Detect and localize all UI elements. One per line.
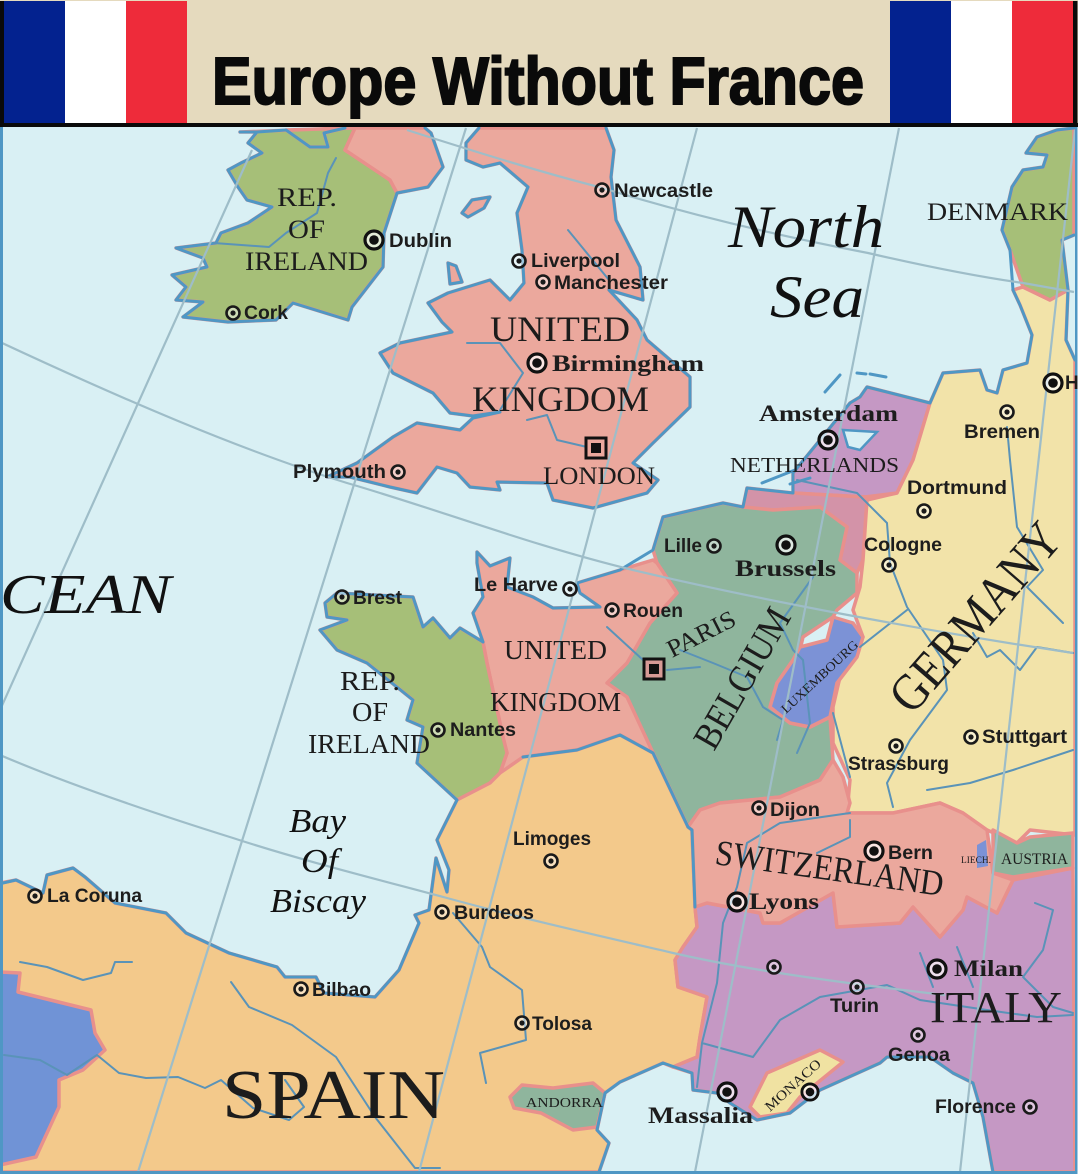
city: Cologne: Cologne [864, 535, 942, 556]
land: Normandy labelled United Kingdom [473, 552, 677, 773]
city: Limoges [513, 829, 591, 868]
label: United Kingdom: KINGDOM [472, 379, 649, 419]
marker: Paris [644, 659, 664, 679]
city: Cork: Cork [244, 303, 288, 324]
label: Republic of Ireland: IRELAND [245, 247, 368, 276]
flag: left French flag [0, 1, 187, 124]
city: Newcastle: Newcastle [614, 181, 713, 202]
label: Republic of Ireland (Brittany): IRELAND [308, 729, 430, 759]
label: Belgium: BELGIUM [685, 600, 800, 756]
label: Bay of Biscay [270, 803, 367, 920]
label: Republic of Ireland (Brittany): OF [352, 697, 388, 727]
label: Republic of Ireland (Brittany): REP. [340, 666, 400, 696]
label: North Sea [727, 194, 884, 330]
land: Denmark [1002, 128, 1074, 300]
city: Lyons: Lyons [749, 889, 819, 914]
city: Lyons [728, 889, 819, 914]
land: Great Britain [327, 128, 690, 508]
islands: Frisian [762, 373, 886, 484]
city: Strassburg [848, 740, 949, 775]
label: Ocean: CEAN [0, 564, 174, 626]
label: London: LONDON [543, 463, 655, 490]
land: southwest France labelled Spain [0, 735, 707, 1172]
label: United Kingdom: UNITED [490, 309, 630, 349]
city: Bern: Bern [888, 843, 933, 864]
city: Milan [928, 956, 1023, 981]
label: North Sea: Sea [770, 264, 864, 330]
coastline: Ireland [172, 128, 443, 322]
label: United Kingdom (Normandy) [490, 635, 621, 717]
label: Republic of Ireland: OF [288, 215, 325, 244]
land: Switzerland [688, 760, 1013, 937]
city: Nantes: Nantes [450, 720, 516, 741]
land: Liechtenstein [977, 840, 988, 868]
label: Paris: PARIS [662, 606, 741, 663]
city: Dijon: Dijon [770, 800, 820, 821]
city: Brussels: Brussels [735, 556, 836, 581]
land: Portugal-coloured region [0, 972, 105, 1165]
city: Rouen: Rouen [623, 601, 683, 622]
country labels [222, 183, 1073, 1134]
header banner [0, 0, 1078, 127]
marker: London [586, 438, 606, 458]
flag: right French flag [890, 1, 1078, 124]
city: Massalia [648, 1083, 754, 1128]
city: Nice marker [802, 1084, 818, 1100]
land: Northern Ireland [345, 128, 443, 193]
land: Germany [833, 287, 1075, 843]
label: Austria: AUSTRIA [1001, 851, 1068, 868]
city: Stuttgart: Stuttgart [982, 727, 1068, 748]
city: Liverpool: Liverpool [531, 251, 620, 272]
label: Monaco: MONACO [763, 1057, 825, 1115]
label: Bay of Biscay: Biscay [270, 883, 367, 920]
land: Austria [993, 830, 1073, 877]
city: Bremen [964, 406, 1040, 443]
label: Bay of Biscay: Of [301, 843, 343, 880]
city: Brussels [735, 536, 836, 581]
city: Lille: Lille [664, 536, 702, 557]
city: Birmingham: Birmingham [552, 351, 704, 376]
land: Isle of Man [462, 197, 490, 217]
city: Amsterdam: Amsterdam [759, 401, 898, 426]
city: Dortmund [907, 478, 1007, 518]
label: Denmark: DENMARK [927, 199, 1068, 226]
sea: IJsselmeer [843, 430, 877, 450]
city: Turin [830, 980, 879, 1017]
city: Strassburg: Strassburg [848, 754, 949, 775]
label: Spain: SPAIN [222, 1057, 445, 1134]
city: Hamburg fragment [1044, 373, 1079, 394]
land: Monaco [750, 1050, 843, 1117]
label: North Sea: North [727, 194, 884, 260]
label: Andorra: ANDORRA [526, 1096, 604, 1111]
land: Andorra [510, 1083, 605, 1130]
city: Hamburg fragment: H [1065, 373, 1079, 394]
city: Dortmund: Dortmund [907, 478, 1007, 499]
city: Limoges: Limoges [513, 829, 591, 850]
city: Dublin: Dublin [389, 231, 452, 252]
land: Italy [673, 868, 1075, 1172]
city: Brest: Brest [353, 588, 403, 609]
city: Turin: Turin [830, 996, 879, 1017]
city: Plymouth: Plymouth [293, 462, 386, 483]
land: Luxembourg [770, 617, 863, 727]
city: Bilbao: Bilbao [312, 980, 371, 1001]
land: Ireland [172, 128, 397, 322]
city: Burdeos: Burdeos [454, 903, 534, 924]
city: Manchester: Manchester [554, 273, 669, 294]
city: Bremen: Bremen [964, 422, 1040, 443]
label: Republic of Ireland [245, 183, 368, 276]
title: Europe Without France [212, 44, 864, 119]
label: Luxembourg: LUXEMBOURG [778, 637, 861, 716]
banner background [0, 0, 1078, 124]
label: United Kingdom (Normandy): KINGDOM [490, 687, 621, 717]
coastline: Great Britain [327, 128, 690, 508]
label: Switzerland: SWITZERLAND [713, 832, 946, 904]
land: Netherlands [793, 387, 930, 497]
label: Bay of Biscay: Bay [289, 803, 347, 840]
city: Cork [226, 303, 288, 324]
capital markers [586, 438, 664, 679]
cities [28, 181, 1079, 1128]
city: Amsterdam [759, 401, 898, 449]
label: United Kingdom [472, 309, 649, 419]
land: northern France labelled Belgium [607, 503, 857, 827]
label: United Kingdom (Normandy): UNITED [504, 635, 607, 665]
banner rule [0, 123, 1078, 127]
city: Le Harve: Le Harve [474, 575, 558, 596]
label: Italy: ITALY [930, 983, 1062, 1032]
city: La Coruna: La Coruna [47, 886, 142, 907]
city: Tolosa: Tolosa [532, 1014, 592, 1035]
city: Genoa [888, 1028, 950, 1066]
city: Cologne [864, 535, 942, 572]
city: Florence: Florence [935, 1097, 1016, 1118]
city: Lille [664, 536, 720, 557]
label: Republic of Ireland: REP. [277, 183, 337, 212]
sea labels [0, 194, 884, 920]
land: rose strip north of Belgium [743, 488, 867, 573]
city: Milan: Milan [954, 956, 1023, 981]
city: Genoa: Genoa [888, 1045, 950, 1066]
city: unnamed marker [768, 960, 780, 974]
label: Republic of Ireland (Brittany) [308, 666, 430, 759]
city: Bern [865, 842, 933, 864]
land: Brittany labelled Ireland [320, 593, 507, 800]
city: Massalia: Massalia [648, 1103, 754, 1128]
land: Anglesey [448, 263, 462, 284]
label: Liechtenstein: LIECH. [961, 856, 991, 866]
label: Netherlands: NETHERLANDS [730, 453, 899, 477]
city: Dublin [365, 231, 452, 252]
